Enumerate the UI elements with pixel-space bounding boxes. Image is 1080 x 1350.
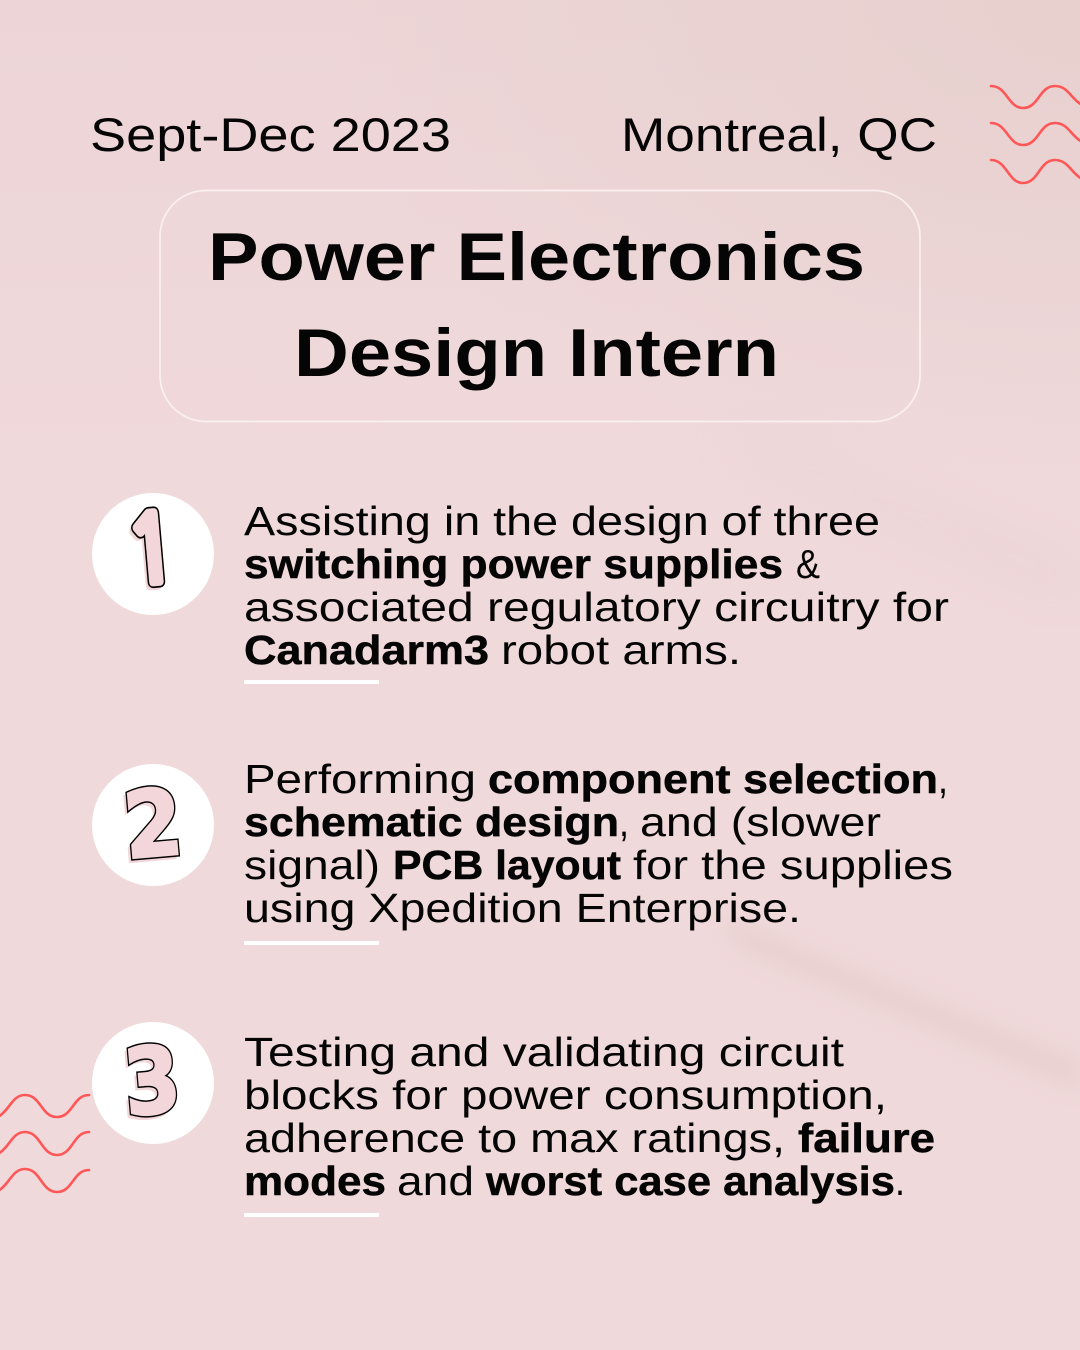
icon: number 2 — [92, 764, 214, 886]
text block 1 — [244, 498, 949, 673]
icon: number 3: 3 — [117, 1029, 182, 1141]
text block 1: Assisting in the design of three — [244, 498, 880, 544]
icon: number 3: 3 — [119, 1026, 185, 1137]
text block 2 — [244, 756, 953, 931]
text block 1: & — [796, 541, 820, 587]
text block 1: Canadarm3 — [244, 627, 489, 673]
title line 1: Power Electronics — [208, 219, 865, 295]
icon: number 2: 2 — [119, 769, 187, 880]
text block 1: switching power supplies — [244, 541, 783, 587]
text block 2: Performing — [244, 756, 476, 802]
text block 2: for the supplies — [633, 842, 953, 888]
decoration: top-right red waves — [991, 86, 1080, 183]
icon: number 2: 2 — [119, 769, 187, 880]
text block 3: adherence to max ratings, — [244, 1115, 785, 1161]
text block 1: associated regulatory circuitry for — [244, 584, 949, 630]
text block 3: modes — [244, 1158, 386, 1204]
text block 2: , — [938, 756, 948, 802]
text block 2: schematic design — [244, 799, 619, 845]
text block 3 — [244, 1029, 935, 1204]
text block 1: robot arms. — [501, 627, 741, 673]
decoration: bottom-left red waves — [0, 1095, 89, 1192]
text block 2: using Xpedition Enterprise. — [244, 885, 801, 931]
location label: Montreal, QC — [621, 108, 937, 161]
text block 3: blocks for power consumption, — [244, 1072, 887, 1118]
title box — [160, 190, 920, 422]
text block 2: component selection — [488, 756, 938, 802]
icon: number 1 — [92, 493, 214, 615]
icon: number 1: 1 — [123, 503, 181, 600]
text block 3: . — [895, 1158, 905, 1204]
text block 2: and (slower — [640, 799, 881, 845]
text block 3: failure — [798, 1115, 935, 1161]
icon: number 2: 2 — [117, 772, 184, 884]
item 2 — [92, 756, 953, 945]
underline 1 — [244, 680, 379, 684]
text block 2: , — [619, 799, 629, 845]
date label: Sept-Dec 2023 — [90, 108, 451, 161]
title line 2: Design Intern — [294, 315, 779, 391]
underline 2 — [244, 941, 379, 945]
text block 2: signal) — [244, 842, 380, 888]
underline 3 — [244, 1213, 379, 1217]
item 3 — [92, 1022, 935, 1217]
icon: number 1: 1 — [120, 506, 178, 603]
icon: number 3 — [92, 1022, 214, 1144]
item 1 — [92, 493, 949, 684]
text block 2: PCB layout — [393, 842, 621, 888]
text block 3: worst case analysis — [485, 1158, 895, 1204]
text block 3: and — [397, 1158, 474, 1204]
text block 3: Testing and validating circuit — [244, 1029, 845, 1075]
icon: number 1: 1 — [123, 503, 181, 600]
icon: number 3: 3 — [119, 1026, 185, 1137]
